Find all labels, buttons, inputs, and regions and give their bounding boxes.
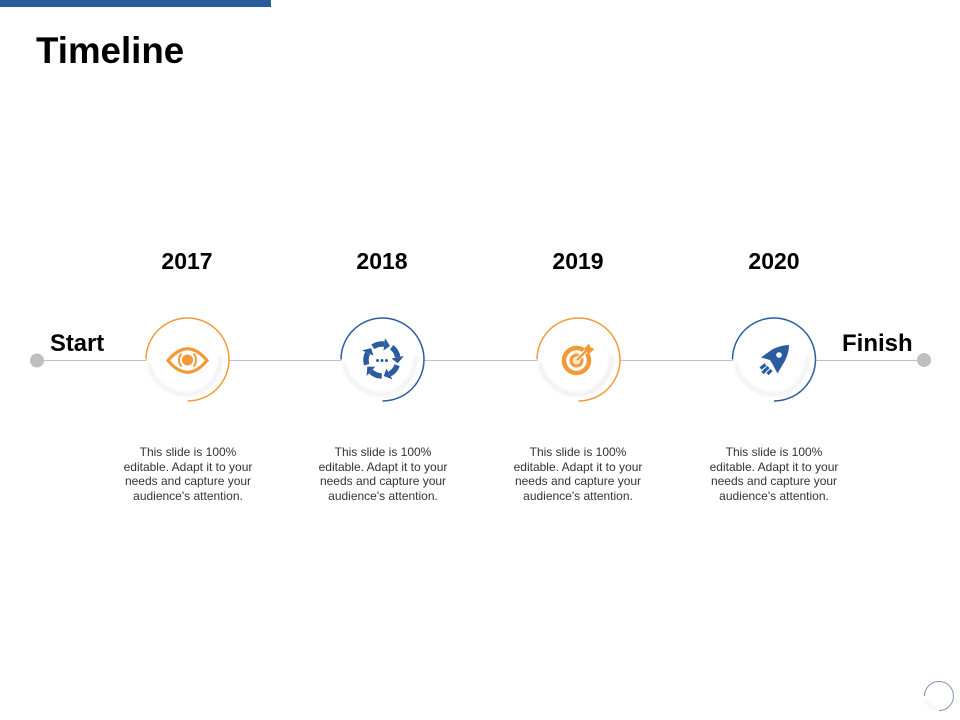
title: Timeline: [36, 30, 184, 71]
text block 2020: audience's attention.: [719, 489, 829, 503]
text block 2018: This slide is 100%: [335, 445, 431, 459]
year 2017: 2017: [161, 248, 213, 274]
text block 2020: This slide is 100%: [726, 445, 822, 459]
top accent bar: [0, 0, 271, 7]
text block 2020: needs and capture your: [711, 474, 837, 488]
node 2020: [732, 318, 816, 401]
text block 2019: audience's attention.: [523, 489, 633, 503]
finish dot: [917, 353, 931, 367]
year 2019: 2019: [552, 248, 604, 274]
text block 2019: editable. Adapt it to your: [514, 460, 642, 474]
text block 2017: audience's attention.: [133, 489, 243, 503]
text block 2017: editable. Adapt it to your: [124, 460, 252, 474]
text block 2019: This slide is 100%: [530, 445, 626, 459]
text block 2018: needs and capture your: [320, 474, 446, 488]
label: Start: Start: [50, 330, 104, 357]
icon: target: [564, 344, 594, 373]
text block 2017: needs and capture your: [125, 474, 251, 488]
text block 2019: needs and capture your: [515, 474, 641, 488]
label: Finish: Finish: [842, 330, 913, 357]
node 2019: [537, 318, 620, 401]
year 2020: 2020: [748, 248, 800, 274]
start dot: [30, 354, 44, 368]
text block 2018: audience's attention.: [328, 489, 438, 503]
year 2018: 2018: [356, 248, 408, 274]
text block 2018: editable. Adapt it to your: [319, 460, 447, 474]
text block 2019: [514, 445, 642, 503]
icon: rocket: [760, 345, 789, 374]
node 2017: [146, 318, 229, 401]
text block 2018: [319, 445, 448, 503]
text block 2017: [124, 445, 252, 503]
text block 2017: This slide is 100%: [140, 445, 236, 459]
timeline line: [37, 360, 924, 362]
icon: eye: [168, 349, 207, 372]
corner circle mark: [924, 682, 954, 710]
node 2018: [341, 318, 424, 401]
icon: cycle arrows: [358, 338, 405, 383]
text block 2020: editable. Adapt it to your: [710, 460, 838, 474]
text block 2020: [710, 445, 838, 503]
